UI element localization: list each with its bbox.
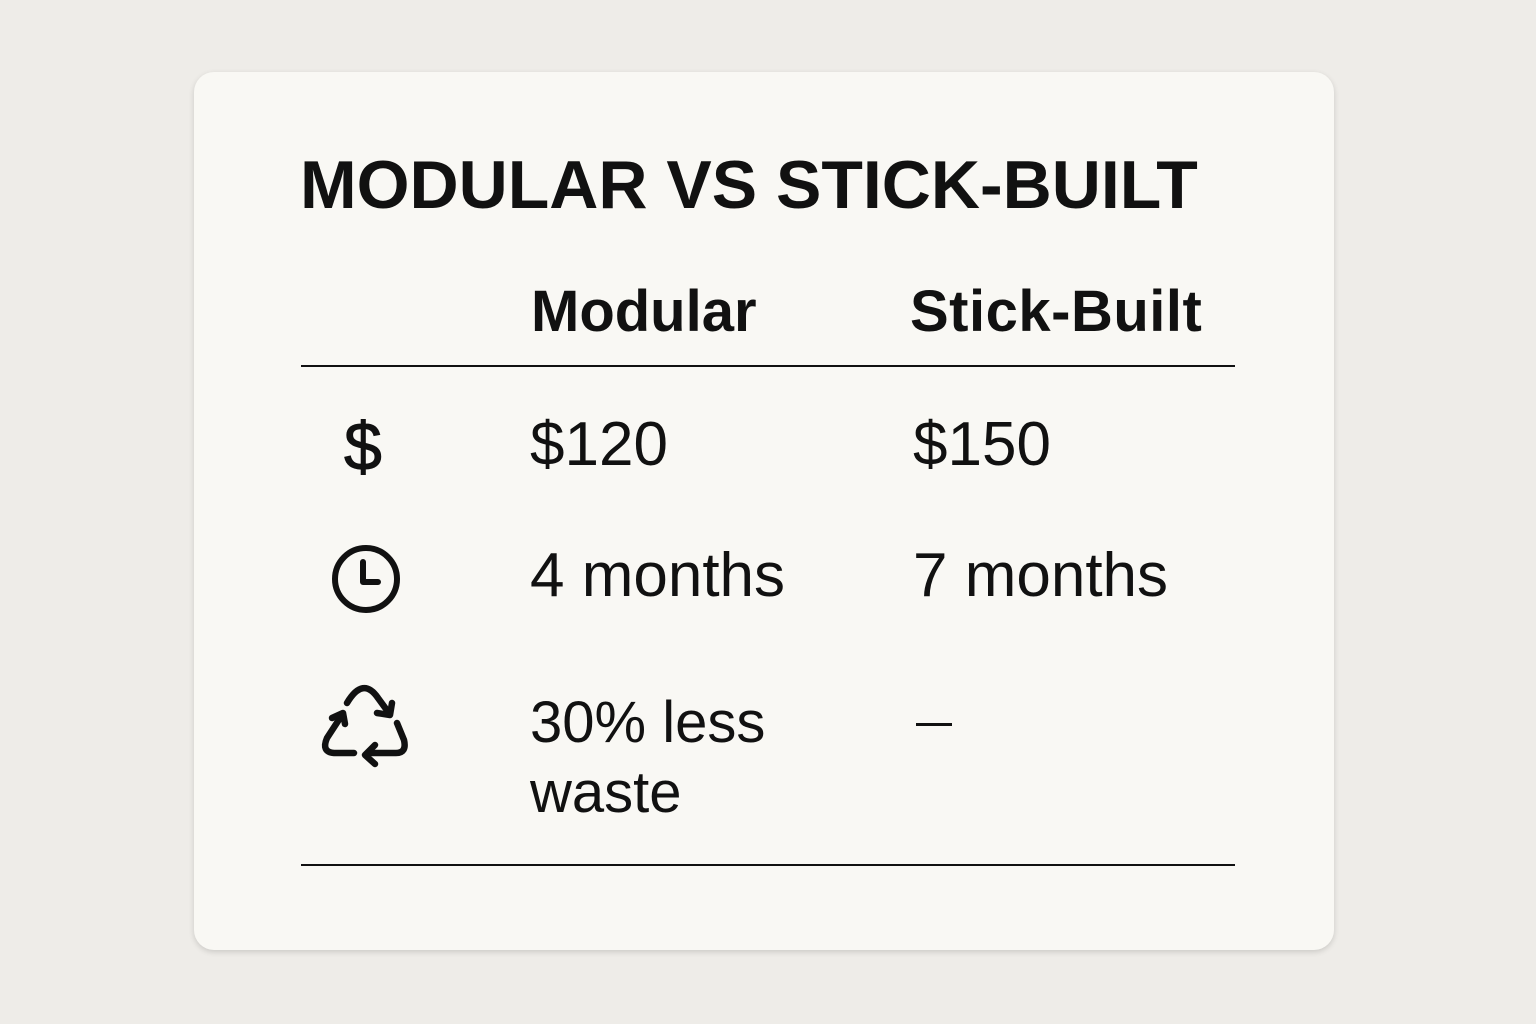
row time: modular: 4 months [530,541,785,610]
row waste: modular: 30% less waste [530,690,765,825]
row time: stick-built: 7 months [913,541,1168,610]
header: Modular: Modular [531,279,757,344]
panel: comparison card [194,72,1334,950]
icon: recycle [322,684,408,768]
title: MODULAR VS STICK-BUILT [300,147,1198,223]
row cost: modular: $120 [530,410,668,479]
icon: clock [332,545,400,613]
row cost: stick-built: $150 [913,410,1051,479]
row waste: stick-built dash [916,723,952,726]
icon: dollar: $ [344,409,382,485]
header: Stick-Built: Stick-Built [910,279,1202,344]
